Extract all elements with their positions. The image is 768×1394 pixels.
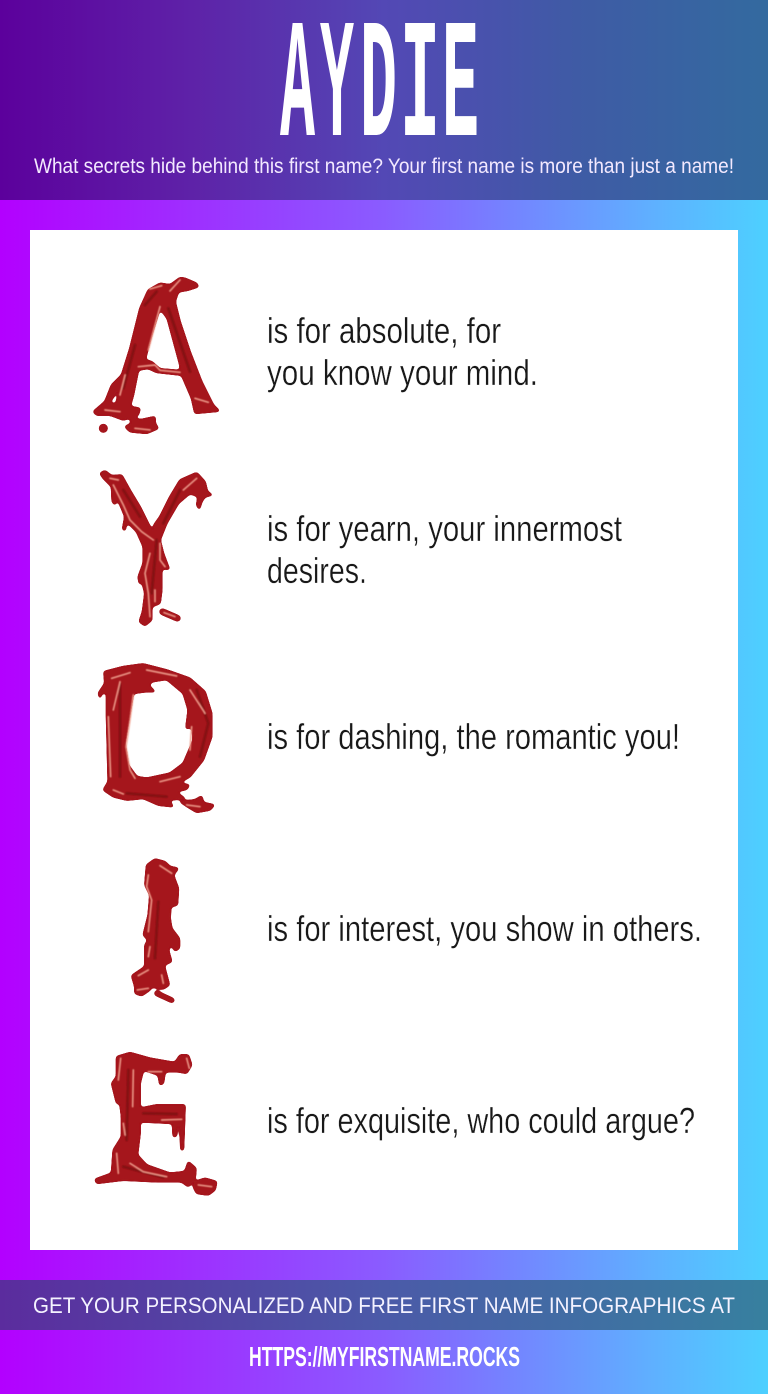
text: letter A meaning: you know your mind. (267, 352, 538, 393)
white card panel (30, 230, 738, 1250)
footer url: HTTPS://MYFIRSTNAME.ROCKS (249, 1341, 520, 1372)
text: letter D meaning: is for dashing, the romantic you! (267, 716, 680, 757)
title (280, 0, 479, 187)
footer call to action: GET YOUR PERSONALIZED AND FREE FIRST NAME INFOGRAPHICS AT (33, 1293, 735, 1318)
header band (0, 0, 768, 200)
icon: blood letter I (132, 859, 179, 1000)
icon: blood letter A (93, 278, 219, 433)
text: letter A meaning (267, 310, 538, 393)
text: letter Y meaning (267, 508, 622, 591)
text: letter Y meaning: is for yearn, your innermost (267, 508, 622, 549)
icon: blood letter E (95, 1053, 217, 1195)
text: letter A meaning: is for absolute, for (267, 310, 501, 351)
icon: blood letter D (98, 664, 214, 812)
text: letter Y meaning: desires. (267, 550, 367, 591)
icon: blood letter Y (100, 471, 212, 626)
footer band (0, 1280, 768, 1330)
